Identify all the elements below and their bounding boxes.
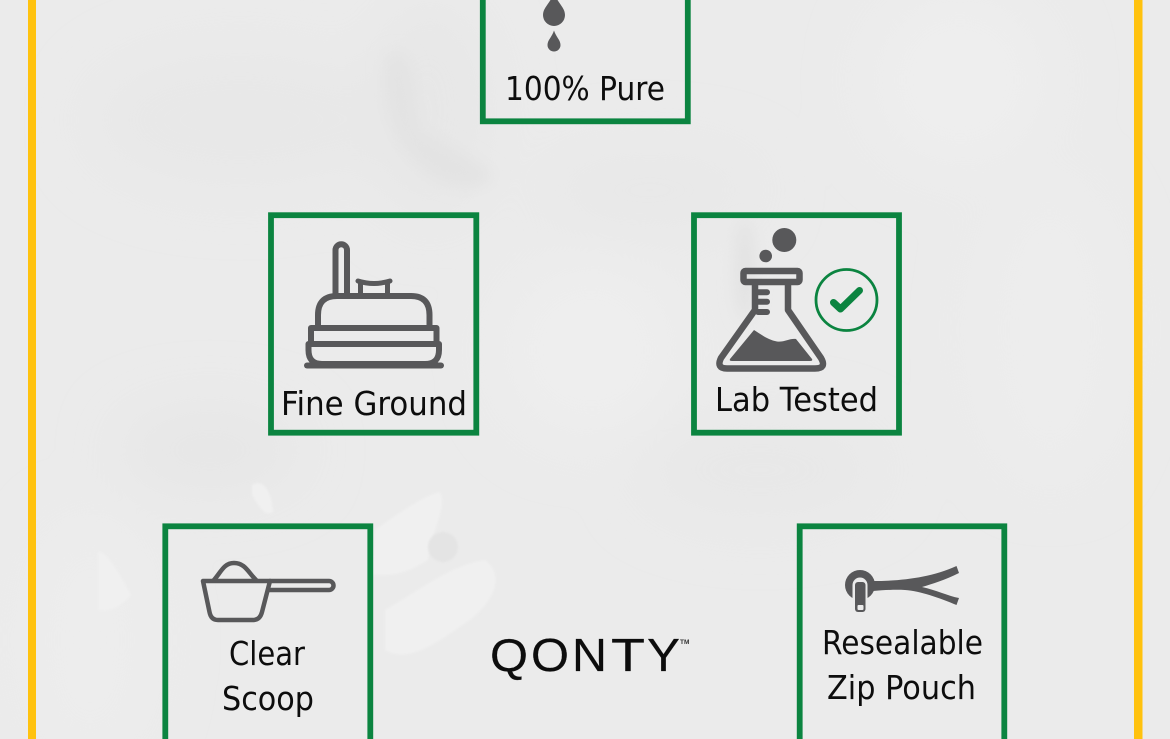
logo: QONTY: T — [611, 629, 645, 681]
logo: QONTY: O — [531, 629, 569, 681]
panel: Lab Tested — [694, 215, 899, 433]
icon: zipper — [845, 566, 959, 612]
icon: flask — [719, 228, 823, 368]
label: Lab Tested: Lab Tested — [715, 380, 878, 419]
panel: Fine Ground — [271, 215, 476, 433]
label: Resealable Zip Pouch — [822, 623, 983, 707]
label: Clear Scoop — [222, 634, 314, 718]
icon: scoop — [203, 563, 334, 620]
logo: QONTY: N — [572, 629, 607, 681]
label: Clear Scoop: Scoop — [222, 679, 314, 718]
label: 100% Pure: 100% Pure — [505, 69, 665, 108]
panel: Resealable Zip Pouch — [800, 526, 1004, 739]
icon: grinder — [307, 244, 441, 366]
label: Resealable Zip Pouch: Resealable — [822, 623, 983, 662]
left yellow border — [28, 0, 36, 739]
logo: QONTY — [490, 629, 689, 681]
label: Fine Ground: Fine Ground — [281, 384, 467, 423]
icon: check mark — [816, 270, 877, 330]
icon: drops — [543, 0, 565, 52]
right yellow border — [1134, 0, 1142, 739]
label: Clear Scoop: Clear — [229, 634, 305, 673]
panel: 100% Pure — [483, 0, 688, 121]
logo: QONTY: Y — [647, 629, 680, 681]
logo: QONTY: Q — [490, 629, 528, 681]
panel: Clear Scoop — [165, 526, 370, 739]
logo: QONTY: TM — [680, 639, 689, 646]
label: Resealable Zip Pouch: Zip Pouch — [827, 668, 976, 707]
